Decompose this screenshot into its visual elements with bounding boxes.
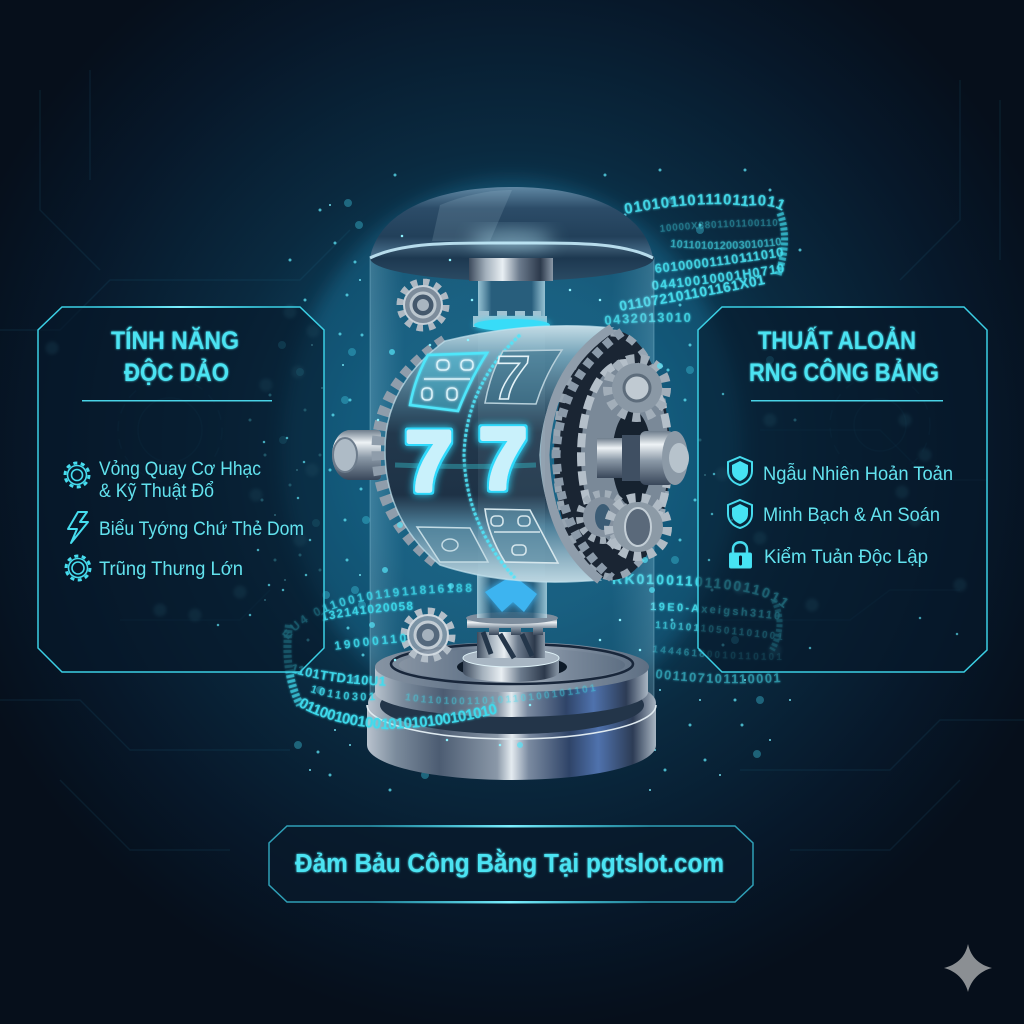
left gear teeth rim (378, 341, 445, 565)
binary ring: top right: 101101012003010110 (670, 236, 782, 250)
right axle (597, 431, 689, 485)
binary ring: bottom left (282, 211, 790, 730)
item: reel (65, 458, 261, 502)
slot reel (378, 326, 689, 582)
metal base (367, 642, 656, 780)
panel heading: THUẤT ALOẢN (758, 325, 916, 355)
panel top glow (90, 306, 270, 308)
upper shaft (469, 255, 553, 331)
top left symbol panel (410, 353, 487, 411)
panel top glow (750, 306, 930, 308)
reel divider glow (464, 335, 520, 578)
icon: shield (728, 500, 752, 528)
glass dome (370, 187, 654, 281)
item: symbols (68, 512, 304, 543)
item: reel: & Kỹ Thuật Đổ (99, 480, 214, 502)
bottom left gear (405, 612, 451, 658)
panel heading: ĐỘC DẢO (124, 357, 229, 387)
panel heading (749, 325, 939, 387)
item: symbols: Biểu Tyớng Chứ Thẻ Dom (99, 518, 304, 540)
binary ring: top right: 60100001110111010 (654, 246, 784, 274)
binary ring: top right: 011072101101161X01 (618, 274, 766, 312)
binary ring: bottom left: 10110100110101101001011010 (406, 684, 596, 705)
panel particles (709, 394, 957, 648)
icon: gear (66, 556, 90, 580)
bottom right symbol panel (485, 509, 558, 563)
banner glow bottom (370, 901, 650, 904)
binary ring: bottom right: 14446180010110101 (652, 645, 782, 660)
binary ring: bottom left: 01100100100101010100101010 (298, 697, 498, 730)
dome rim (370, 243, 653, 258)
flange with teeth (467, 618, 557, 635)
icon: padlock (730, 542, 752, 568)
binary ring: bottom right: 11010110501101001 (655, 620, 782, 640)
right metal rim (545, 328, 612, 580)
panel: features (38, 306, 324, 672)
right small gear top (608, 359, 666, 417)
panel frame (38, 307, 324, 672)
heading divider (82, 400, 272, 402)
top right outlined seven (485, 344, 562, 413)
panel: RNG (698, 306, 987, 672)
binary ring: bottom left: 19000110 (334, 632, 407, 652)
lower stem with blue crystal (463, 570, 559, 682)
binary ring: top right: 10000X8801101100110 (660, 218, 778, 233)
panel particles (218, 438, 310, 625)
item: reel: Vỏng Quay Cơ Hhạc (99, 458, 261, 480)
item: audit (730, 542, 928, 568)
item: audit: Kiểm Tuản Độc Lập (764, 546, 928, 568)
bottom left symbol panel (417, 527, 488, 562)
upper disc (375, 667, 648, 717)
binary ring: bottom right (612, 573, 788, 685)
stem base rings (463, 658, 559, 682)
binary ring: top right: 0432013010 (604, 311, 692, 326)
middle band line (395, 465, 536, 466)
binary ring: top right (604, 192, 786, 326)
item: random (728, 457, 953, 485)
soft glow behind device (282, 180, 742, 720)
binary ring: bottom left: EU4 0110010119118161881 (282, 582, 472, 640)
translucent tube band (478, 332, 545, 578)
foreground particles (372, 236, 660, 745)
large inner gear (581, 363, 669, 547)
bottom banner (269, 825, 753, 904)
right small gear lower right (609, 498, 667, 556)
glass cylinder (370, 258, 654, 698)
lower disc (367, 705, 656, 780)
faint circuit pattern (0, 70, 1024, 850)
dome top (370, 187, 653, 258)
dome highlight band (432, 190, 512, 241)
bokeh particles (52, 312, 960, 650)
banner frame (269, 826, 753, 902)
drum body (385, 326, 612, 582)
binary ring: bottom left: 10110301 (310, 684, 376, 702)
item: random: Ngẫu Nhiên Hoản Toản (763, 462, 953, 485)
icon: lightning bolt (68, 512, 88, 543)
left axle (332, 430, 381, 480)
item: transparent: Minh Bạch & An Soán (763, 504, 940, 526)
icon: shield (728, 457, 752, 485)
binary ring: bottom left: 1101TTD110U10 (290, 664, 386, 687)
right small gear lower left (580, 494, 626, 540)
heading divider (751, 400, 943, 402)
dense ring edge (287, 625, 300, 705)
right end disc (554, 330, 670, 580)
binary ring: bottom right: RK0100110110011011 (612, 573, 788, 608)
banner glow top (370, 825, 650, 828)
binary ring: bottom left: 132141020058 (321, 600, 414, 622)
panel heading: RNG CÔNG BẢNG (749, 357, 939, 387)
banner text: Đảm Bảu Công Bằng Tại pgtslot.com (295, 848, 724, 878)
icon: gear outline (65, 463, 89, 487)
binary ring: bottom right: 19E0-Axeigsh3110 (650, 601, 780, 620)
blue crystal (485, 575, 537, 612)
top left gear (401, 283, 445, 327)
dense ring edge right (772, 600, 780, 650)
glass tube (477, 570, 547, 618)
binary ring: bottom right: 001107101110001 (655, 668, 781, 685)
panel frame (698, 307, 987, 672)
panel heading (111, 326, 239, 387)
glowing seven 2: 7 (479, 411, 527, 507)
top right outlined seven: 7 (489, 344, 533, 413)
panel heading: TÍNH NĂNG (111, 326, 239, 355)
item: jackpot: Trũng Thưng Lớn (99, 558, 243, 580)
background particles (250, 170, 800, 790)
icon: sparkle watermark (944, 944, 992, 992)
binary ring: top right: 04410010001H0710 (650, 263, 786, 291)
item: transparent (728, 500, 940, 528)
dense ring edge top (778, 213, 785, 275)
glowing seven 1: 7 (406, 414, 452, 508)
dome underside (370, 235, 654, 281)
